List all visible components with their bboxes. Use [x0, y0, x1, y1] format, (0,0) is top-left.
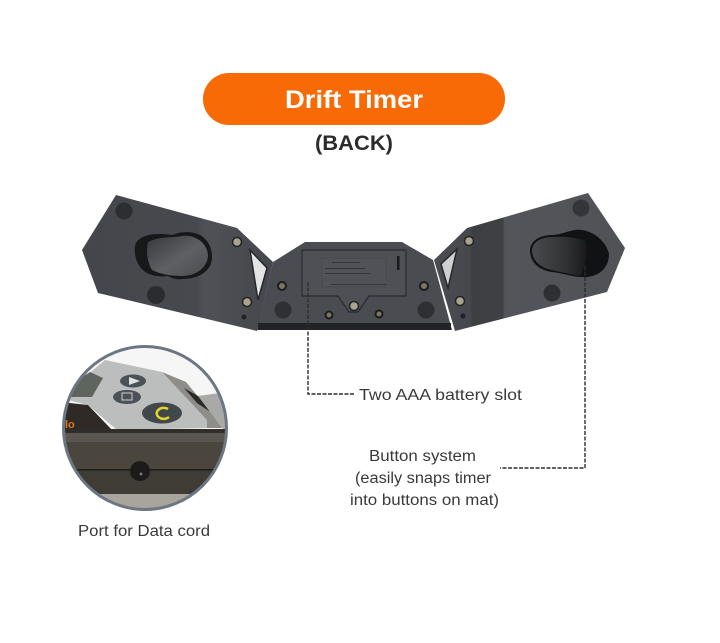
leader line: button system — [500, 266, 585, 468]
device: drift timer back view — [82, 193, 625, 331]
right wing — [434, 193, 625, 331]
inset photo: data port close-up — [60, 345, 230, 514]
label: Port for Data cord: Port for Data cord — [78, 523, 210, 540]
label: Button system — [350, 448, 499, 509]
label: Two AAA battery slot: Two AAA battery slot — [359, 387, 523, 404]
left wing — [82, 195, 273, 331]
centre body — [257, 242, 452, 330]
title pill: Drift Timer — [203, 73, 505, 125]
label: Button system: (easily snaps timer — [355, 470, 491, 487]
subtitle: (BACK): (BACK) — [315, 132, 393, 155]
label: Button system: into buttons on mat) — [350, 492, 499, 509]
leader line: battery slot — [308, 282, 354, 394]
title pill: Drift Timer: Drift Timer — [285, 86, 423, 114]
label: Button system: Button system — [369, 448, 476, 465]
inset photo: data port close-up: lo — [65, 419, 75, 431]
battery cover — [302, 250, 406, 312]
